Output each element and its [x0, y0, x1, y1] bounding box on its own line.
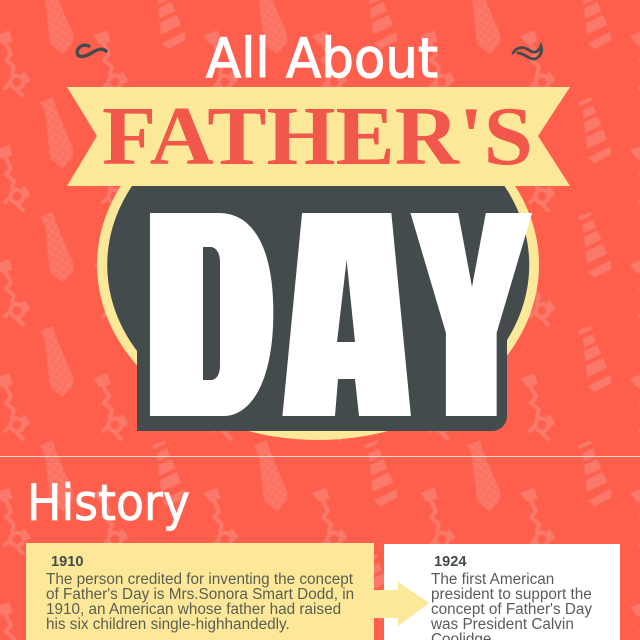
panel: 1910 [26, 543, 374, 640]
panel: 1924 [384, 544, 620, 640]
text block: 1924 story: The first American [431, 571, 554, 588]
heading: History: History [27, 474, 190, 532]
heading: DAY: Y [423, 151, 519, 479]
heading: DAY: A [318, 149, 375, 479]
divider line [0, 456, 640, 457]
text block: 1924 story: was President Calvin [431, 616, 574, 633]
text block: 1924 story [431, 571, 592, 640]
title: All About: All About [206, 27, 438, 90]
text block: 1910 story: his six children single-highhandedly. [46, 616, 290, 633]
year: 1910: 1910 [51, 554, 83, 570]
text block: 1910 story [46, 571, 354, 633]
text block: 1910 story: of Father's Day is Mrs.Sonora Smart Dodd, in [46, 586, 354, 603]
year: 1924: 1924 [434, 554, 466, 570]
ribbon banner [67, 87, 570, 186]
text block: 1910 story: The person credited for inventing the concept [46, 571, 353, 588]
icon: right moustache [513, 46, 542, 59]
icon: left moustache [77, 45, 106, 56]
letter counters [203, 212, 486, 416]
badge: oval behind DAY [97, 90, 539, 440]
heading: FATHER'S: FATHER'S [102, 90, 533, 183]
heading: DAY: D [156, 148, 264, 479]
text block: 1924 story: concept of Father's Day [431, 601, 592, 618]
text block: 1910 story: 1910, an American whose father had raised [46, 601, 341, 618]
heading: DAY [156, 148, 519, 479]
text block: 1924 story: president to support the [431, 586, 592, 603]
